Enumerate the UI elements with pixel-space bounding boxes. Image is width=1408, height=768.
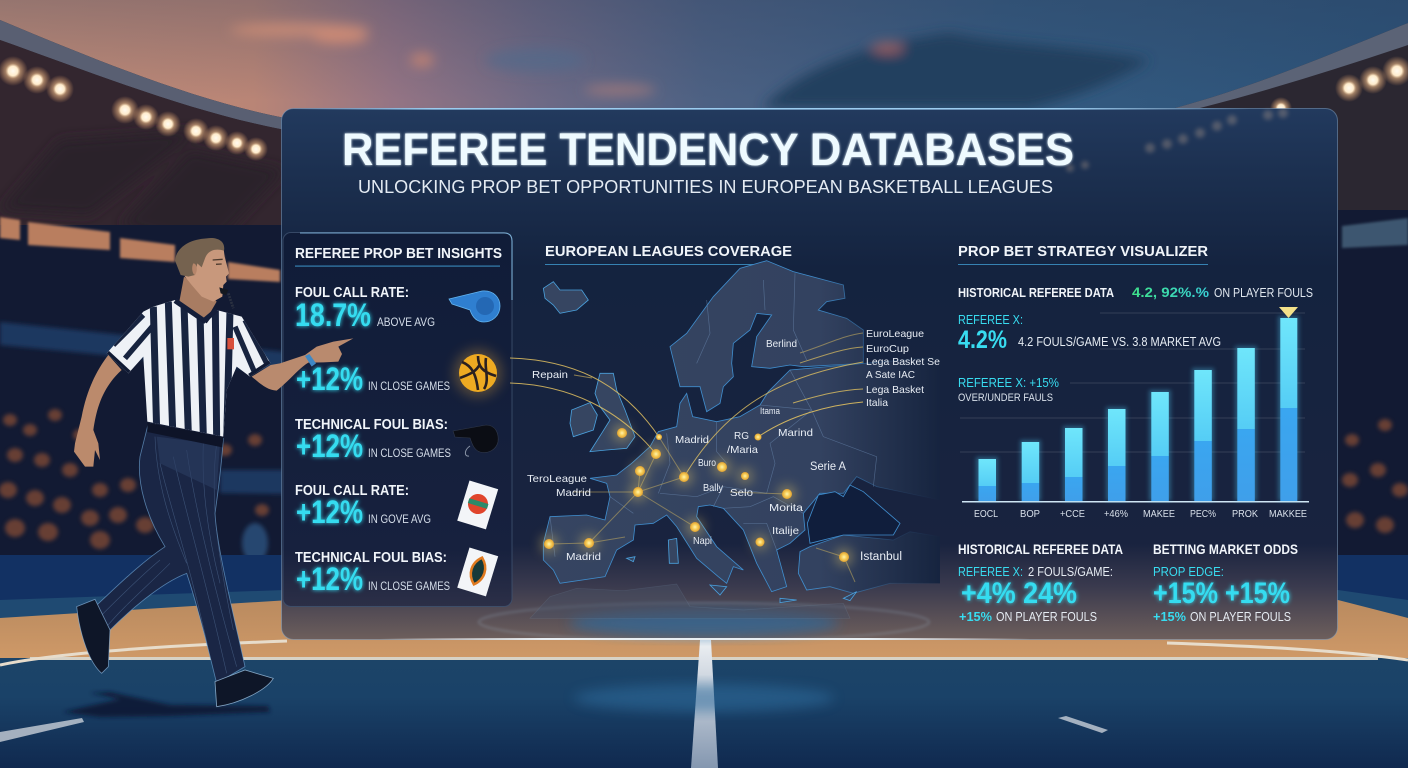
map labels: Repain xyxy=(532,369,568,381)
map labels: Buro xyxy=(698,457,716,469)
right forearm and pointing hand xyxy=(252,338,353,391)
heading: insights: REFEREE PROP BET INSIGHTS xyxy=(295,246,502,262)
chart baseline xyxy=(962,501,1309,502)
bar labels: PROK xyxy=(1232,508,1258,520)
continental europe xyxy=(543,357,940,592)
block: historical referee data: HISTORICAL REFEREE DATA xyxy=(958,541,1123,557)
map labels: Lega Basket Se xyxy=(866,356,940,368)
bar labels: +CCE xyxy=(1060,508,1085,520)
map labels: Madrid xyxy=(675,434,709,446)
map labels: EuroLeague xyxy=(866,328,924,340)
iceland xyxy=(543,282,588,313)
front shoe xyxy=(215,670,273,707)
map labels: /Maria xyxy=(727,444,758,456)
insight: technical foul bias: TECHNICAL FOUL BIAS: xyxy=(295,417,448,433)
scandinavia and northwest russia xyxy=(670,261,863,412)
insight: technical foul bias 2 xyxy=(295,550,450,597)
bar labels: EOCL xyxy=(974,508,998,520)
insight: close games: IN CLOSE GAMES xyxy=(368,379,450,393)
turkey xyxy=(798,532,940,593)
map labels: Lega Basket xyxy=(866,384,924,396)
neck xyxy=(179,277,217,322)
map labels: Selo xyxy=(730,487,753,499)
insight: technical foul bias 2: IN CLOSE GAMES xyxy=(368,579,450,593)
top bar marker xyxy=(1279,307,1298,318)
bar labels: +46% xyxy=(1104,508,1128,520)
block: betting market odds: +15% xyxy=(1153,609,1186,624)
stadium lights right xyxy=(1270,56,1408,119)
ireland xyxy=(570,403,597,437)
title: REFEREE TENDENCY DATABASES xyxy=(342,124,1074,175)
stat: referee x 4.2: REFEREE X: xyxy=(958,312,1023,327)
whistle in mouth xyxy=(219,287,233,308)
historical data line: ON PLAYER FOULS xyxy=(1214,286,1313,300)
bar labels: MAKEE xyxy=(1143,508,1175,520)
insight: close games xyxy=(296,361,450,397)
back shoe xyxy=(77,599,110,673)
map labels: Itama xyxy=(760,406,780,416)
bar labels: BOP xyxy=(1020,508,1040,520)
stat: referee x 15: REFEREE X: +15% xyxy=(958,375,1059,390)
map labels: Italia xyxy=(866,397,888,409)
map labels xyxy=(527,328,940,563)
icon: blue whistle xyxy=(449,291,500,322)
left arm xyxy=(74,355,122,467)
trousers xyxy=(95,423,245,683)
league connector lines xyxy=(510,333,863,582)
insight: technical foul bias 2: TECHNICAL FOUL BIAS: xyxy=(295,550,447,566)
block: historical referee data: +4% 24% xyxy=(961,577,1077,610)
bar labels: PEC% xyxy=(1190,508,1216,520)
trouser pinstripes and highlight xyxy=(100,437,237,673)
historical data line xyxy=(958,284,1313,300)
jersey badge xyxy=(227,338,234,349)
insight: technical foul bias: +12% xyxy=(296,428,363,464)
map labels: Madrid xyxy=(566,551,601,563)
insight: foul call rate 12: +12% xyxy=(296,494,363,530)
hair xyxy=(175,238,224,277)
map labels: Italije xyxy=(772,525,799,537)
insight: technical foul bias xyxy=(295,417,451,464)
block: betting market odds: ON PLAYER FOULS xyxy=(1190,610,1291,624)
belt xyxy=(147,423,223,447)
map city markers xyxy=(541,425,852,565)
face details xyxy=(192,259,223,275)
insight: foul call rate 12: FOUL CALL RATE: xyxy=(295,483,409,499)
block: historical referee data: +15% xyxy=(959,609,992,624)
block: historical referee data: ON PLAYER FOULS xyxy=(996,610,1097,624)
block: betting market odds: BETTING MARKET ODDS xyxy=(1153,541,1298,557)
referee figure xyxy=(74,238,353,707)
heading rule xyxy=(295,266,500,267)
icon: card with emblem xyxy=(457,547,498,596)
insight: foul call rate 12 xyxy=(295,483,431,530)
wristband xyxy=(305,354,316,367)
block: historical referee data: 2 FOULS/GAME: xyxy=(1028,565,1113,579)
court floor xyxy=(0,590,1408,768)
historical data line: 4.2, 92%.% xyxy=(1132,284,1210,300)
map labels: Marind xyxy=(778,427,813,439)
map labels: Bally xyxy=(703,482,724,494)
insight: technical foul bias 2: +12% xyxy=(296,561,363,597)
map labels: Serie A xyxy=(810,461,846,473)
block: betting market odds: +15% +15% xyxy=(1153,577,1290,610)
map labels: RG xyxy=(734,430,749,442)
map labels: Napi xyxy=(693,535,712,547)
heading: prop bet strategy visualizer: PROP BET STRATEGY VISUALIZER xyxy=(958,244,1209,260)
block: historical referee data xyxy=(958,541,1123,624)
stat: referee x 15: OVER/UNDER FAULS xyxy=(958,392,1053,404)
hologram base glow xyxy=(380,603,1030,641)
bar labels: MAKKEE xyxy=(1269,508,1307,520)
map labels: A Sate IAC xyxy=(866,369,915,381)
stat: referee x 4.2: 4.2% xyxy=(958,326,1007,354)
map labels: Madrid xyxy=(556,487,591,499)
bar chart xyxy=(960,307,1309,520)
insight: technical foul bias: IN CLOSE GAMES xyxy=(368,446,451,460)
map labels: Istanbul xyxy=(860,551,902,563)
stat: referee x 4.2 xyxy=(958,312,1221,354)
icon: black whistle xyxy=(453,425,498,456)
insight: foul call rate 18.7: 18.7% xyxy=(295,297,371,333)
icon: euroleague ball xyxy=(454,349,502,397)
stadium lights left xyxy=(0,56,268,161)
main glass panel xyxy=(282,108,1338,640)
icon: card with ball xyxy=(457,480,498,529)
jersey collar xyxy=(175,301,217,321)
panel top highlight xyxy=(290,108,1250,110)
stat: referee x 4.2: 4.2 FOULS/GAME VS. 3.8 MARKET AVG xyxy=(1018,335,1221,349)
block: betting market odds xyxy=(1153,541,1298,624)
subtitle: UNLOCKING PROP BET OPPORTUNITIES IN EUROPEAN BASKETBALL LEAGUES xyxy=(358,177,1053,197)
map of europe xyxy=(530,261,940,618)
map labels: Morita xyxy=(769,502,803,514)
islands xyxy=(627,538,857,603)
head xyxy=(182,245,229,302)
insight: foul call rate 12: IN GOVE AVG xyxy=(368,512,431,526)
block: historical referee data: REFEREE X: xyxy=(958,564,1023,579)
north africa xyxy=(530,584,850,618)
panel: referee prop bet insights xyxy=(283,232,512,606)
great britain xyxy=(590,373,635,452)
insight: foul call rate 18.7: ABOVE AVG xyxy=(377,315,435,329)
bar labels xyxy=(974,508,1307,520)
black sea xyxy=(807,485,900,543)
historical data line: HISTORICAL REFEREE DATA xyxy=(958,286,1114,300)
blurred lights through panel xyxy=(1066,108,1288,172)
jersey xyxy=(106,300,270,436)
heading: european leagues coverage: EUROPEAN LEAGUES COVERAGE xyxy=(545,244,792,260)
map labels: EuroCup xyxy=(866,343,909,355)
right stadium roof and stands xyxy=(1060,23,1408,620)
map labels: TeroLeague xyxy=(527,473,587,485)
insight: foul call rate 18.7: FOUL CALL RATE: xyxy=(295,285,409,301)
map labels: Berlind xyxy=(766,338,797,350)
block: betting market odds: PROP EDGE: xyxy=(1153,564,1224,579)
left stadium roof and stands xyxy=(0,20,285,620)
referee floor shadow xyxy=(63,692,270,717)
insight: close games: +12% xyxy=(296,361,363,397)
stat: referee x 15 xyxy=(958,375,1059,404)
insight: foul call rate 18.7 xyxy=(295,285,435,333)
country borders xyxy=(550,273,877,557)
